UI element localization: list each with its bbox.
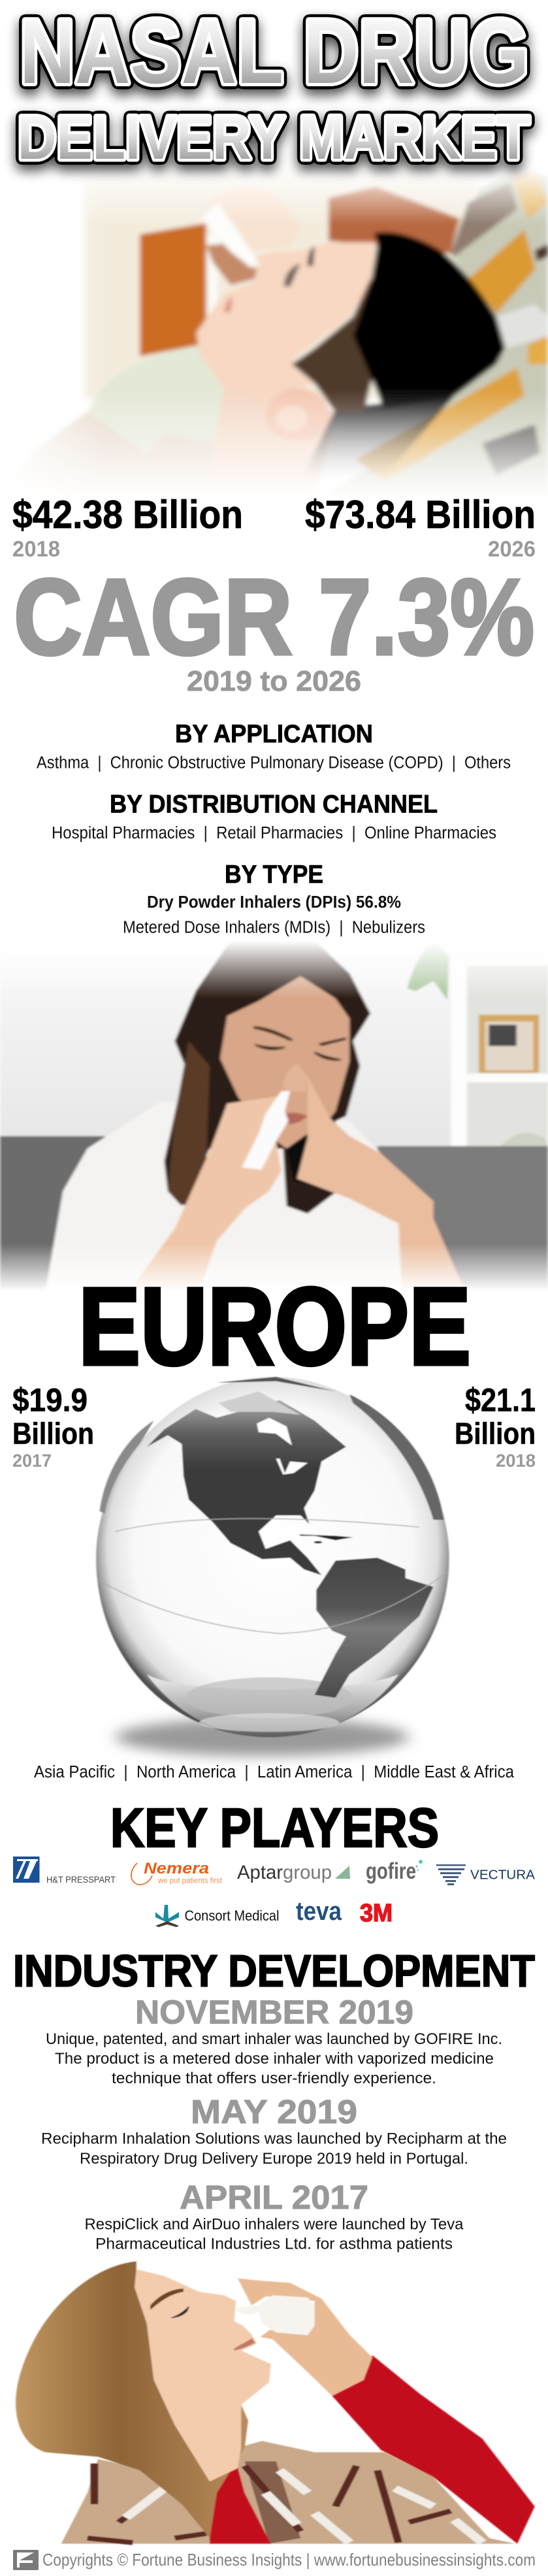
logo: Nemera: Nemera xyxy=(144,1860,209,1877)
logo: gofire: gofire xyxy=(366,1858,416,1884)
photo: woman using nasal spray xyxy=(0,941,548,1298)
regional value 2017 xyxy=(12,1381,94,1470)
segment: by application: BY APPLICATION xyxy=(175,720,373,748)
segment: by type: Dry Powder Inhalers (DPIs) 56.8% xyxy=(147,893,401,912)
heading: key players: KEY PLAYERS xyxy=(110,1797,439,1858)
segment: by type xyxy=(123,861,425,937)
development: April 2017: APRIL 2017 xyxy=(180,2179,368,2216)
development: April 2017 xyxy=(85,2179,464,2253)
regional value 2018: $21.1 xyxy=(465,1381,536,1418)
logo: Consort Medical xyxy=(155,1905,280,1927)
development: April 2017: RespiClick and AirDuo inhalers were launched by Teva xyxy=(85,2215,464,2234)
segment: by type: Metered Dose Inhalers (MDIs) | Nebulizers xyxy=(123,919,425,937)
market value 2018: 2018 xyxy=(12,537,60,562)
logo: Vectura: VECTURA xyxy=(470,1868,536,1882)
regional value 2017: $19.9 xyxy=(12,1381,88,1418)
development: November 2019: Unique, patented, and smart inhaler was launched by GOFIRE Inc. xyxy=(46,2030,502,2048)
development: November 2019: NOVEMBER 2019 xyxy=(135,1993,413,2031)
development: May 2019: MAY 2019 xyxy=(191,2093,357,2130)
logo: H&T Presspart xyxy=(13,1857,116,1885)
segment: by type: BY TYPE xyxy=(225,861,323,889)
development: November 2019: The product is a metered dose inhaler with vaporized medicine xyxy=(55,2050,494,2068)
logo: Nemera xyxy=(131,1860,223,1885)
photo: woman using nasal drops xyxy=(16,2261,535,2544)
market value 2026: $73.84 Billion xyxy=(305,493,536,537)
logo: Aptargroup: Aptargroup xyxy=(237,1862,332,1883)
icon: Fortune Business Insights logo xyxy=(13,2550,39,2570)
title xyxy=(18,1,530,172)
development: May 2019: Respiratory Drug Delivery Europe 2019 held in Portugal. xyxy=(80,2150,468,2168)
regional value 2018: Billion xyxy=(455,1417,536,1451)
logo: 3M: 3M xyxy=(360,1900,393,1927)
market value 2026: 2026 xyxy=(488,537,536,562)
segment: by distribution channel: BY DISTRIBUTION CHANNEL xyxy=(110,791,438,818)
logo: Teva: teva xyxy=(296,1897,342,1926)
development: May 2019 xyxy=(41,2093,507,2168)
market value 2026 xyxy=(305,493,536,562)
regional value 2017: Billion xyxy=(12,1417,94,1451)
development: November 2019: technique that offers user-friendly experience. xyxy=(112,2070,436,2087)
regional value 2018 xyxy=(455,1381,536,1470)
segment: by application: Asthma | Chronic Obstructive Pulmonary Disease (COPD) | Others xyxy=(37,754,511,772)
development: November 2019 xyxy=(46,1993,502,2087)
logo: Nemera: we put patients first xyxy=(157,1875,223,1885)
heading: Europe: EUROPE xyxy=(78,1264,471,1388)
regions list: Asia Pacific | North America | Latin America | Middle East & Africa xyxy=(34,1763,515,1781)
regional value 2017: 2017 xyxy=(12,1451,52,1470)
regional value 2018: 2018 xyxy=(496,1451,536,1470)
market value 2018: $42.38 Billion xyxy=(12,493,243,537)
logo: Consort Medical: Consort Medical xyxy=(184,1907,280,1924)
CAGR headline: 2019 to 2026 xyxy=(187,665,361,697)
segment: by distribution channel: Hospital Pharmacies | Retail Pharmacies | Online Pharmacies xyxy=(52,824,496,842)
logo: H&T Presspart: H&T PRESSPART xyxy=(46,1874,116,1885)
logo: Vectura xyxy=(436,1864,536,1885)
icon: glass globe xyxy=(96,1377,449,1756)
development: April 2017: Pharmaceutical Industries Ltd. for asthma patients xyxy=(95,2235,453,2253)
market value 2018 xyxy=(12,493,243,562)
segment: by distribution channel xyxy=(52,791,496,842)
photo: man using nasal drops xyxy=(0,158,548,497)
segment: by application xyxy=(37,720,511,772)
development: May 2019: Recipharm Inhalation Solutions was launched by Recipharm at the xyxy=(41,2130,507,2147)
